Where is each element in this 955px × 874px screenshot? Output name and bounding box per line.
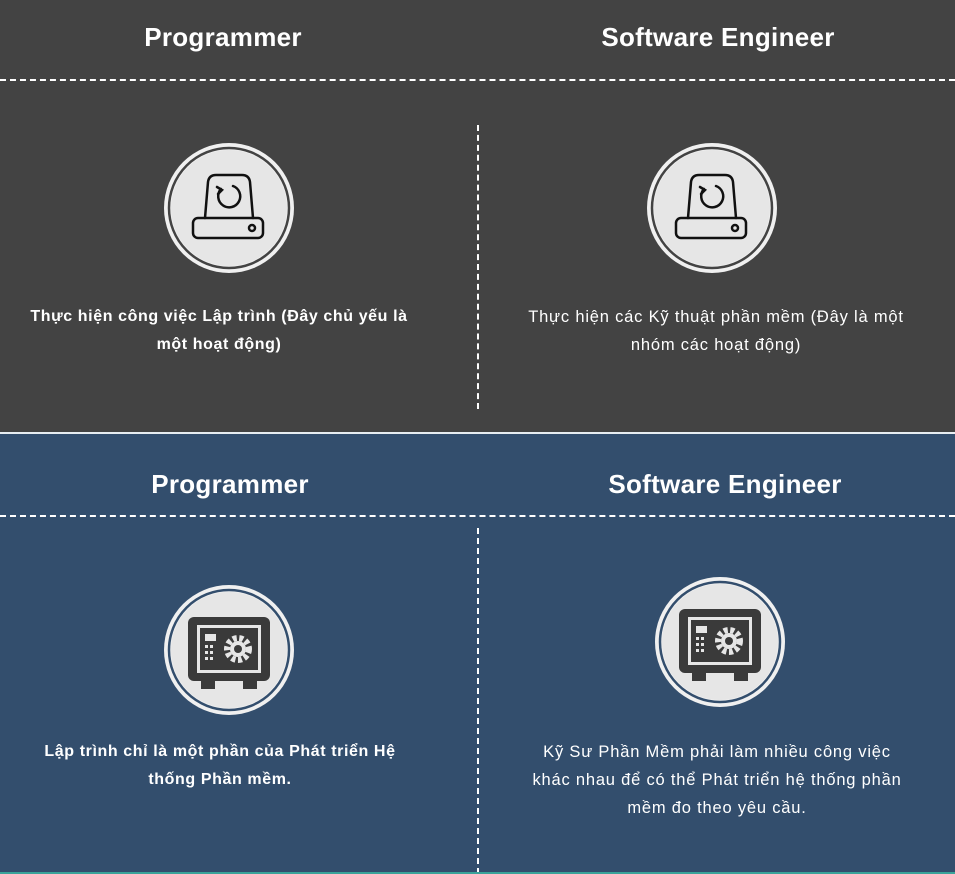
text: engineer description: Kỹ Sư Phần Mềm phải làm nhiều công việc [543,743,891,761]
text: programmer description [44,743,396,788]
text: engineer description: mềm đo theo yêu cầu. [627,799,807,817]
panel: bottom comparison [0,434,955,874]
text: engineer description: Thực hiện các Kỹ thuật phần mềm (Đây là một [528,308,904,326]
heading: Software Engineer: Software Engineer [608,469,842,499]
text: engineer description [528,308,904,354]
text: programmer description [30,308,408,353]
icon: safe [655,577,785,707]
text: programmer description: một hoạt động) [157,336,281,353]
icon: safe [164,585,294,715]
heading: Software Engineer: Software Engineer [601,22,835,52]
text: engineer description [532,743,902,817]
icon: hard drive refresh [647,143,777,273]
icon: hard drive refresh [164,143,294,273]
text: engineer description: khác nhau để có thể Phát triển hệ thống phần [532,771,902,789]
panel: top comparison [0,0,955,432]
heading: Programmer: Programmer [151,469,309,499]
text: engineer description: nhóm các hoạt động) [631,336,801,354]
heading: Programmer: Programmer [144,22,302,52]
text: programmer description: Thực hiện công việc Lập trình (Đây chủ yếu là [30,308,408,325]
text: programmer description: Lập trình chỉ là một phần của Phát triển Hệ [44,743,396,760]
text: programmer description: thống Phần mềm. [148,771,292,788]
